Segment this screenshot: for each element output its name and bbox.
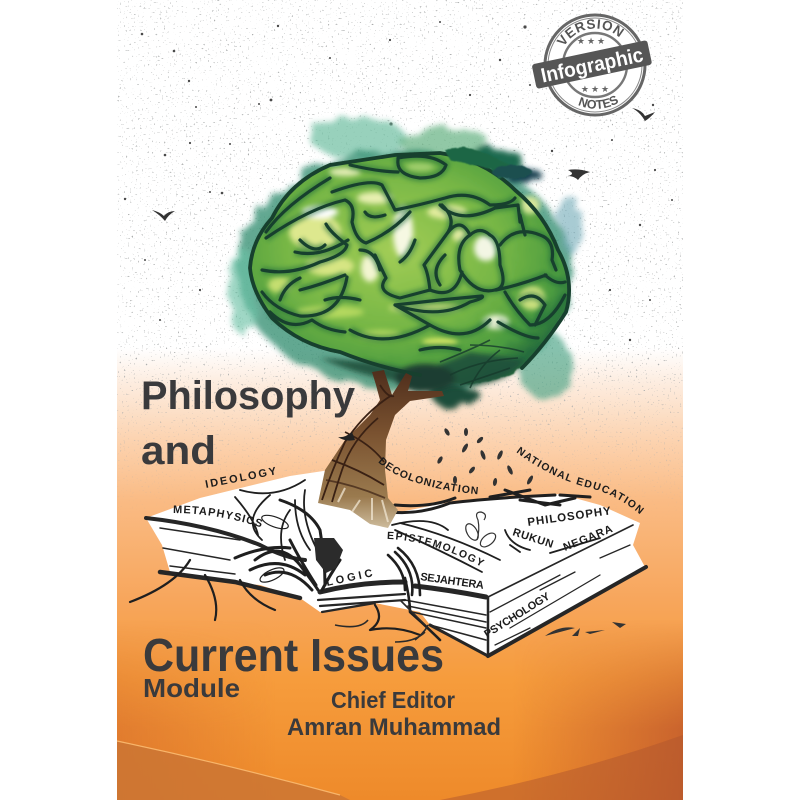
title: Philosophy: Philosophy <box>141 374 356 418</box>
version stamp badge: ★★★ <box>581 84 611 94</box>
book keywords: DECOLONIZATION <box>378 457 478 494</box>
dark shadow at brain base <box>320 352 525 392</box>
icon: bird right <box>568 169 590 180</box>
book keywords: RUKUN <box>511 526 555 551</box>
tree trunk <box>318 370 444 528</box>
book keywords: PHILOSOPHY <box>527 505 612 529</box>
title: Current Issues: Current Issues <box>143 629 444 681</box>
title: and: and <box>141 429 216 473</box>
book keywords: LOGIC <box>325 567 374 589</box>
roots across pages <box>130 480 600 640</box>
dark flower core <box>314 538 343 573</box>
version stamp badge: VERSION <box>556 19 624 44</box>
book pages <box>146 470 645 656</box>
icon: bird top <box>632 108 655 121</box>
open book <box>130 470 646 656</box>
version stamp badge <box>532 14 652 116</box>
scattered ink dots <box>124 21 673 341</box>
birds below book <box>545 622 626 636</box>
book edge lines <box>146 518 646 656</box>
subtitle: Module: Module <box>143 673 240 703</box>
book keywords: SEJAHTERA <box>420 571 485 592</box>
gyri shading <box>262 156 565 350</box>
book keywords: IDEOLOGY <box>204 465 278 491</box>
falling leaves <box>436 428 534 486</box>
icon: bird left <box>152 210 175 221</box>
editor label: Chief Editor <box>331 687 455 713</box>
brain outline <box>250 153 569 375</box>
gyri lines <box>262 156 565 350</box>
editor name: Amran Muhammad <box>287 714 501 741</box>
book keywords <box>174 446 644 641</box>
bottom waves <box>117 735 683 800</box>
book keywords: EPISTEMOLOGY <box>388 532 485 566</box>
tree canopy: brain <box>230 118 581 407</box>
watercolor splash <box>230 118 581 407</box>
cerebellum <box>440 340 524 388</box>
ink speckle background <box>117 0 683 520</box>
book keywords: PSYCHOLOGY <box>482 590 553 641</box>
dark blot on brain top <box>445 148 532 180</box>
version stamp badge: Infographic <box>539 43 645 88</box>
brain body <box>250 153 569 384</box>
version stamp badge: NOTES <box>578 96 618 109</box>
roots over title <box>335 600 428 642</box>
small flower <box>463 512 498 550</box>
light patches <box>268 163 545 346</box>
book keywords: NEGARA <box>562 523 614 554</box>
cover panel <box>117 0 683 800</box>
book keywords: NATIONAL EDUCATION <box>516 446 644 514</box>
book keywords: METAPHYSICS <box>174 506 262 527</box>
bottom shading <box>117 620 683 800</box>
version stamp badge: ★★★ <box>577 36 607 46</box>
